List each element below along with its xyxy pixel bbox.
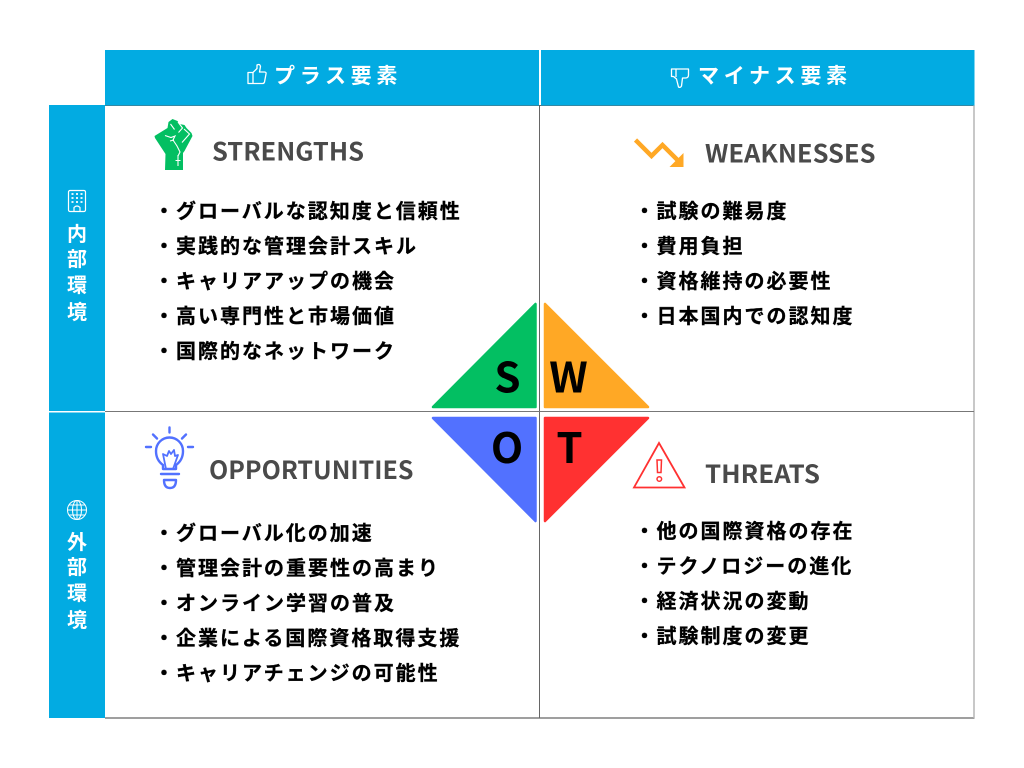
panel: opportunities bbox=[146, 428, 461, 686]
icon: building bbox=[68, 190, 86, 212]
heading: strengths: STRENGTHS bbox=[212, 132, 364, 168]
panel: weaknesses bbox=[634, 134, 876, 329]
list: weaknesses: ・日本国内での認知度 bbox=[634, 300, 854, 329]
row heading: internal environment: 境 bbox=[67, 296, 87, 325]
list: opportunities: ・管理会計の重要性の高まり bbox=[154, 552, 440, 581]
list: strengths: ・実践的な管理会計スキル bbox=[154, 230, 418, 259]
panel: strengths bbox=[154, 119, 462, 364]
icon: downward trend arrow bbox=[636, 140, 684, 167]
list: threats: ・経済状況の変動 bbox=[634, 585, 810, 614]
triangle: T bbox=[545, 415, 648, 521]
list: strengths bbox=[154, 195, 462, 364]
row heading: external environment: 外 bbox=[67, 526, 87, 555]
row heading: internal environment: 環 bbox=[67, 269, 87, 298]
triangle: O bbox=[433, 415, 536, 521]
list: opportunities: ・グローバル化の加速 bbox=[154, 517, 374, 546]
list: weaknesses: ・費用負担 bbox=[634, 230, 744, 259]
column header: plus factors bbox=[105, 50, 539, 106]
list: threats bbox=[634, 515, 854, 649]
row heading: internal environment bbox=[67, 218, 87, 325]
list: weaknesses: ・資格維持の必要性 bbox=[634, 265, 832, 294]
triangle: S: S bbox=[494, 344, 521, 406]
icon: thumbs down bbox=[672, 69, 688, 87]
list: opportunities: ・オンライン学習の普及 bbox=[154, 587, 396, 616]
list: threats: ・テクノロジーの進化 bbox=[634, 550, 853, 579]
list: strengths: ・キャリアアップの機会 bbox=[154, 265, 396, 294]
column header: minus factors bbox=[541, 50, 974, 106]
column heading: plus factors: プラス要素 bbox=[274, 60, 402, 90]
list: strengths: ・国際的なネットワーク bbox=[154, 335, 396, 364]
panel: threats bbox=[634, 443, 854, 649]
triangle: W: W bbox=[549, 344, 588, 406]
icon: raised fist bbox=[154, 119, 192, 170]
row header: internal environment bbox=[49, 105, 105, 411]
icon: light bulb bbox=[146, 428, 193, 488]
row heading: internal environment: 部 bbox=[67, 243, 87, 272]
list: threats: ・他の国際資格の存在 bbox=[634, 515, 854, 544]
icon: warning triangle bbox=[634, 443, 684, 488]
heading: weaknesses: WEAKNESSES bbox=[705, 134, 876, 170]
SWOT centre diamond bbox=[433, 304, 648, 521]
row header: external environment bbox=[49, 412, 105, 718]
list: opportunities: ・キャリアチェンジの可能性 bbox=[154, 657, 440, 686]
triangle: W bbox=[545, 304, 648, 407]
list: opportunities bbox=[154, 517, 461, 686]
icon: thumbs up bbox=[248, 64, 266, 84]
list: weaknesses: ・試験の難易度 bbox=[634, 195, 788, 224]
row heading: external environment bbox=[67, 526, 87, 633]
list: strengths: ・高い専門性と市場価値 bbox=[154, 300, 396, 329]
triangle: S bbox=[433, 304, 536, 407]
row heading: external environment: 境 bbox=[67, 604, 87, 633]
list: opportunities: ・企業による国際資格取得支援 bbox=[154, 622, 461, 651]
row heading: internal environment: 内 bbox=[67, 218, 87, 247]
row heading: external environment: 部 bbox=[67, 551, 87, 580]
column heading: minus factors: マイナス要素 bbox=[698, 60, 852, 90]
icon: globe bbox=[68, 500, 86, 520]
heading: threats: THREATS bbox=[705, 455, 820, 491]
list: threats: ・試験制度の変更 bbox=[634, 620, 810, 649]
triangle: O: O bbox=[491, 415, 523, 476]
heading: opportunities: OPPORTUNITIES bbox=[209, 451, 414, 487]
list: strengths: ・グローバルな認知度と信頼性 bbox=[154, 195, 462, 224]
row heading: external environment: 環 bbox=[67, 577, 87, 606]
triangle: T: T bbox=[556, 415, 583, 476]
list: weaknesses bbox=[634, 195, 854, 329]
